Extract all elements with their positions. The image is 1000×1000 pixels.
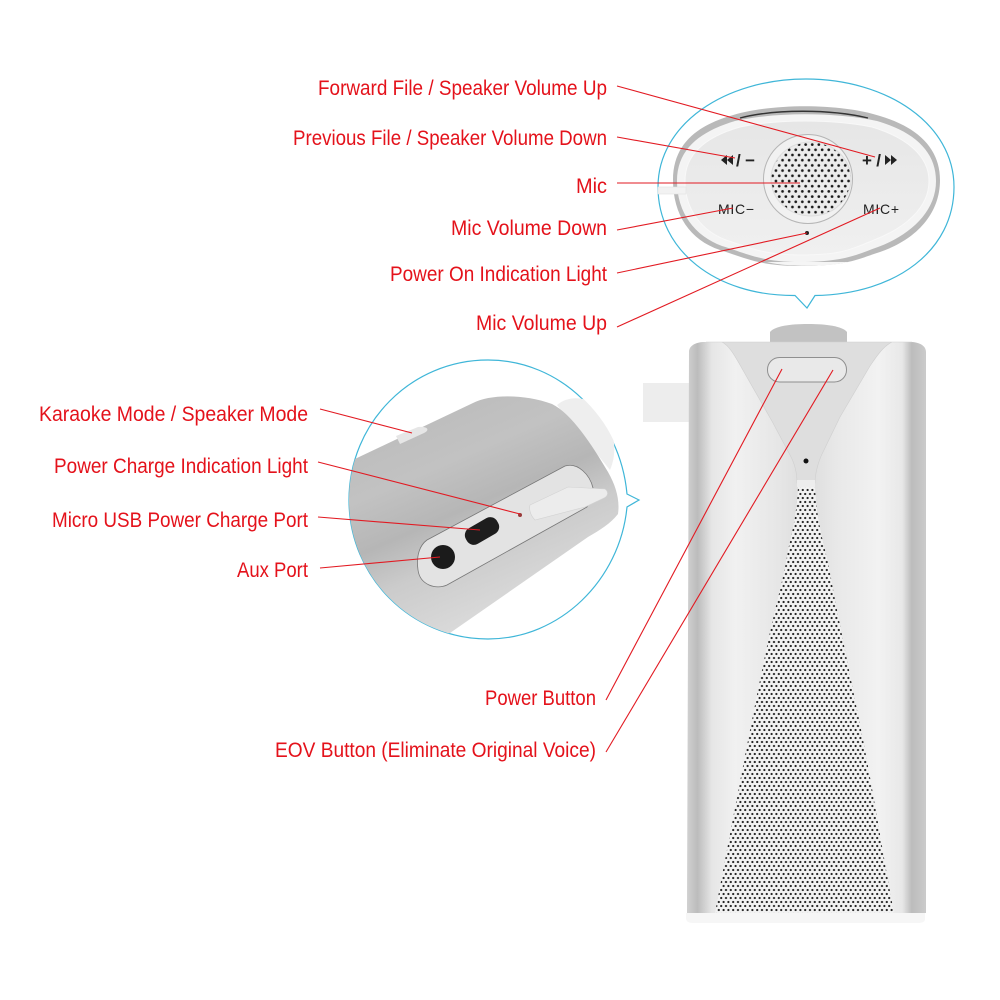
- bottom base: [686, 913, 925, 923]
- panel: dark top edge: [740, 111, 868, 118]
- callout bubble: top controls: [658, 79, 954, 308]
- speaker product: [643, 324, 926, 923]
- side view of speaker: [349, 396, 618, 634]
- V-shaped top plate: [706, 342, 912, 483]
- side tab: [643, 383, 690, 422]
- callout bubble: side ports: [330, 360, 639, 650]
- label: mic: Mic: [576, 175, 607, 198]
- top dial: [770, 324, 847, 342]
- end cap: [557, 398, 614, 470]
- control pill: [768, 358, 846, 382]
- indicator dot: [804, 458, 808, 464]
- label: mic volume down: Mic Volume Down: [451, 217, 607, 240]
- aux port: [431, 545, 455, 569]
- power on light: [805, 231, 809, 235]
- label: power on indication light: Power On Indication Light: [390, 263, 607, 286]
- label: power button: Power Button: [485, 687, 596, 710]
- label: aux port: Aux Port: [237, 559, 308, 582]
- body: [687, 342, 926, 913]
- leader lines: [318, 86, 880, 752]
- cylinder body: [349, 396, 618, 634]
- previous icon: [721, 151, 755, 170]
- panel: outer grey rim: [673, 106, 940, 266]
- front speaker grille: [715, 487, 894, 913]
- port cover recess: [417, 465, 593, 587]
- label: power charge light: Power Charge Indication Light: [54, 455, 308, 478]
- micro USB port: [464, 517, 500, 545]
- power charge light: [518, 513, 522, 517]
- label: EOV button: EOV Button (Eliminate Original Voice): [275, 739, 596, 762]
- cable notch: [658, 187, 686, 194]
- forward icon: [862, 151, 897, 170]
- label: MIC plus: MIC+: [863, 201, 899, 217]
- label: previous file: Previous File / Speaker Volume Down: [293, 127, 607, 150]
- open rubber flap: [530, 487, 608, 520]
- panel: bottom white lip: [767, 262, 848, 266]
- bubble outline: [349, 360, 639, 639]
- forward icon: + /: [862, 151, 881, 170]
- previous icon: / −: [736, 151, 755, 170]
- label: micro USB port: Micro USB Power Charge Port: [52, 509, 308, 532]
- speaker ring: [764, 134, 852, 224]
- label: forward file: Forward File / Speaker Volume Up: [318, 77, 607, 100]
- label: mic volume up: Mic Volume Up: [476, 312, 607, 335]
- bottom neck: [797, 480, 815, 487]
- label: karaoke mode: Karaoke Mode / Speaker Mode: [39, 403, 308, 426]
- mic grille: [771, 142, 851, 216]
- panel: inner face: [685, 121, 929, 255]
- panel: button face: [677, 114, 936, 262]
- label: MIC minus: MIC−: [718, 201, 754, 217]
- karaoke switch: [396, 427, 427, 444]
- control panel close-up: [658, 106, 940, 266]
